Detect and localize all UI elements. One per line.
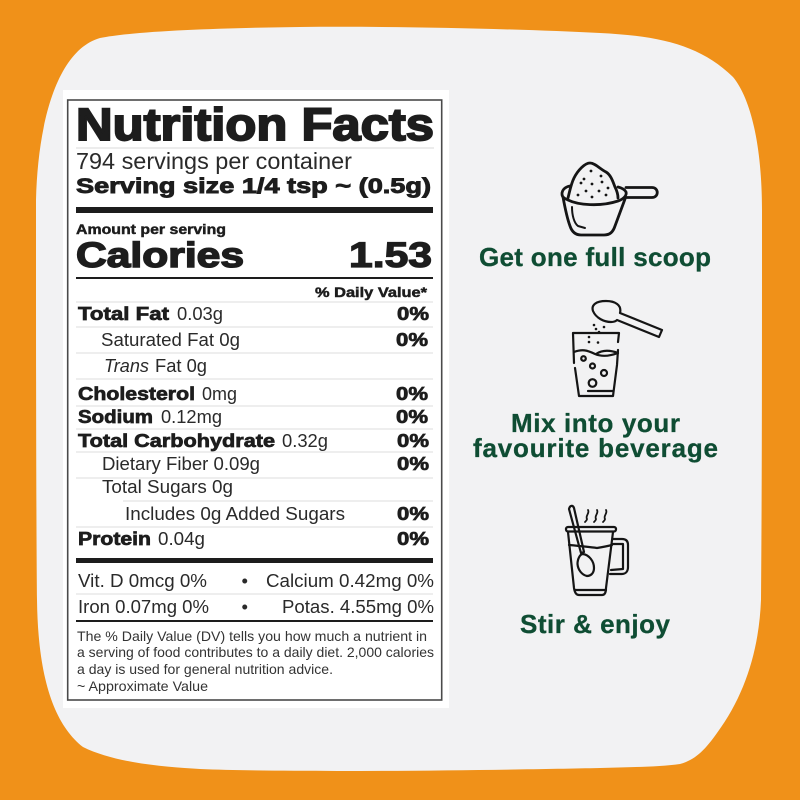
step 2 label: Mix into your — [511, 408, 680, 438]
daily value heading: % Daily Value* — [315, 284, 428, 300]
vitamins and minerals: • — [242, 570, 248, 591]
servings: Serving size 1/4 tsp ~ (0.5g) — [76, 174, 431, 198]
footnote: The % Daily Value (DV) tells you how much a nutrient in — [77, 629, 427, 644]
nutrient rows: Sodium — [78, 407, 153, 427]
vitamins and minerals — [78, 570, 434, 617]
icon: scoop — [562, 163, 657, 235]
nutrient rows: 0% — [397, 431, 429, 451]
vitamins and minerals: Vit. D 0mcg 0% — [78, 570, 207, 591]
step 2 label: favourite beverage — [473, 433, 718, 463]
nutrient rows: Fat 0g — [155, 355, 207, 376]
footnote: a serving of food contributes to a daily diet. 2,000 calories — [77, 645, 434, 660]
nutrient rows: Saturated Fat 0g — [101, 329, 240, 350]
footnote: ~ Approximate Value — [77, 679, 208, 694]
nutrient rows: Includes 0g Added Sugars — [125, 503, 345, 524]
icon: spoon over glass — [573, 301, 662, 396]
nutrient rows: Protein — [78, 529, 151, 549]
panel: nutrition facts — [63, 90, 449, 708]
nutrient rows: 0.32g — [282, 430, 328, 451]
vitamins and minerals: Iron 0.07mg 0% — [78, 596, 209, 617]
title: Nutrition Facts — [76, 99, 434, 150]
nutrient rows: 0% — [397, 304, 429, 324]
nutrient rows: 0% — [397, 454, 429, 474]
nutrient rows: Cholesterol — [78, 384, 195, 404]
nutrient rows: Total Carbohydrate — [78, 431, 275, 451]
nutrient rows: 0% — [396, 407, 428, 427]
nutrient rows: 0% — [397, 504, 429, 524]
footnote: a day is used for general nutrition advice. — [77, 662, 333, 677]
servings — [76, 148, 431, 198]
calories — [76, 222, 432, 275]
nutrient rows: 0.03g — [177, 303, 223, 324]
step 3 label: Stir & enjoy — [520, 609, 671, 639]
step 2 label — [473, 408, 718, 463]
nutrient rows: Total Sugars 0g — [102, 476, 233, 497]
nutrient rows: Dietary Fiber 0.09g — [102, 453, 260, 474]
servings: 794 servings per container — [76, 148, 352, 174]
calories: 1.53 — [349, 235, 432, 275]
icon: mug with spoon — [566, 506, 628, 595]
nutrient rows: 0% — [396, 330, 428, 350]
vitamins and minerals: • — [242, 596, 248, 617]
footnote — [77, 629, 434, 694]
nutrient rows: Total Fat — [78, 304, 169, 324]
nutrient rows: 0% — [397, 529, 429, 549]
nutrient rows: Trans — [104, 355, 149, 376]
nutrient rows: 0.12mg — [161, 406, 222, 427]
nutrient rows — [78, 303, 429, 549]
nutrient rows: 0mg — [202, 383, 237, 404]
calories: Calories — [76, 235, 244, 275]
label border — [68, 100, 442, 700]
step 1 label: Get one full scoop — [479, 242, 711, 272]
label background — [63, 90, 449, 708]
vitamins and minerals: Calcium 0.42mg 0% — [266, 570, 434, 591]
nutrient rows: 0.04g — [158, 528, 205, 549]
vitamins and minerals: Potas. 4.55mg 0% — [282, 596, 434, 617]
calories: Amount per serving — [76, 222, 226, 237]
nutrient rows: 0% — [396, 384, 428, 404]
